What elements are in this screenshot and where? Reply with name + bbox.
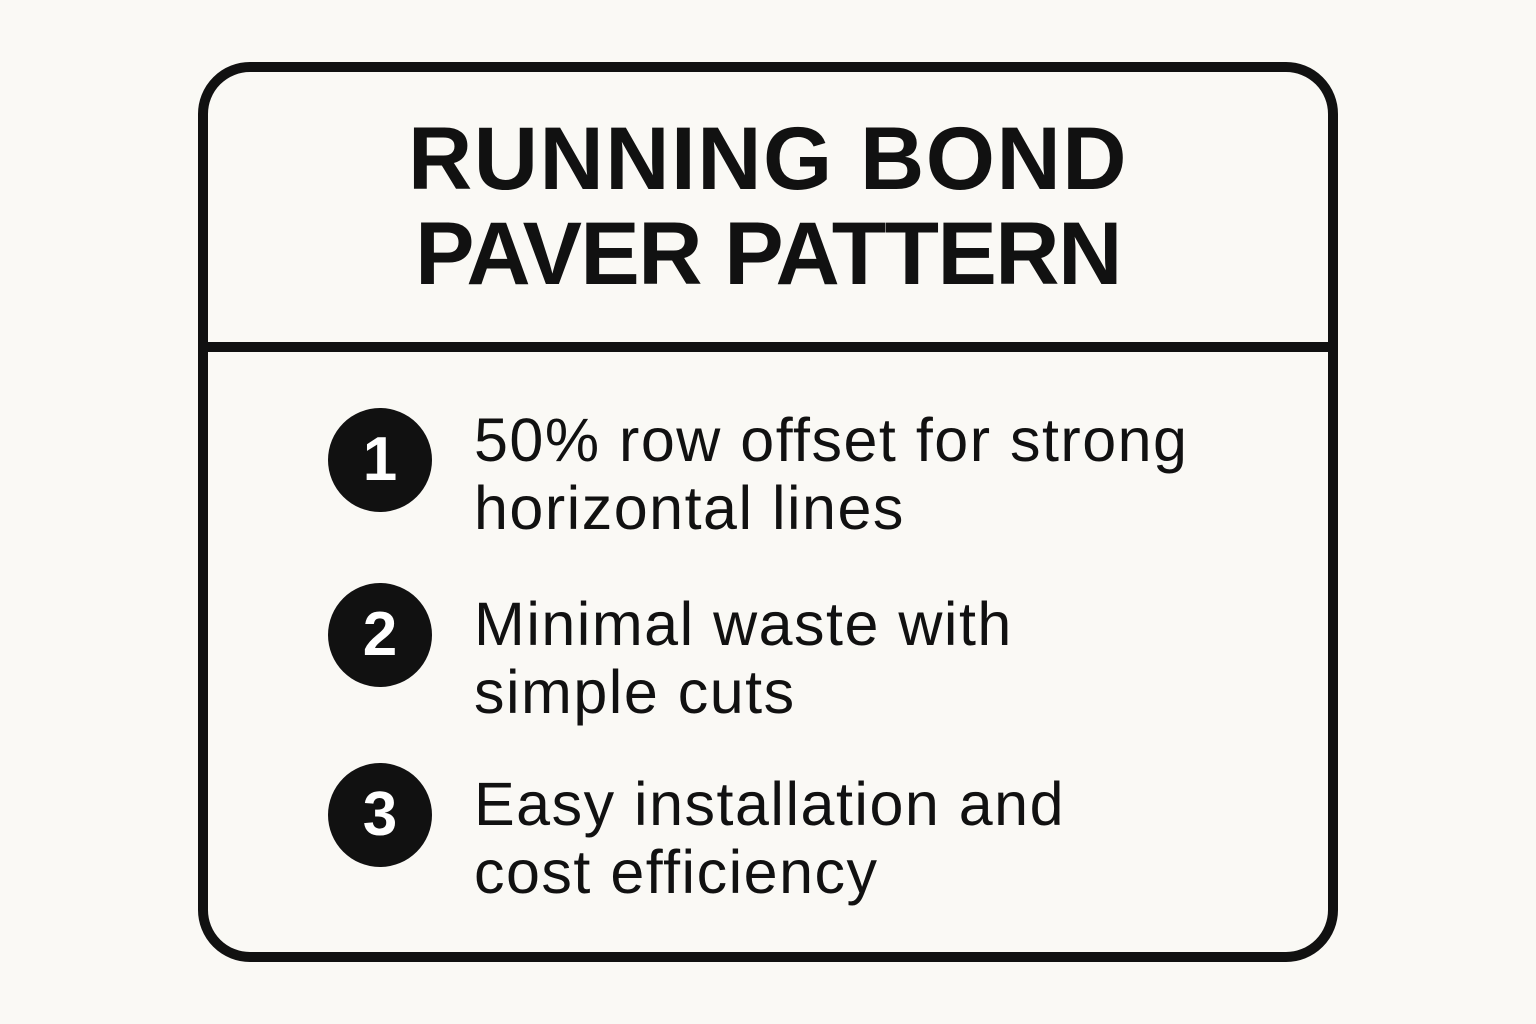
icon: number 1 [328,408,432,512]
text: item 2: Minimal waste with [474,590,1013,658]
title: PAVER PATTERN [415,203,1121,303]
title [408,108,1128,303]
icon: number 2: 2 [363,600,397,669]
icon: number 3: 3 [363,780,397,849]
title: RUNNING BOND [408,108,1128,208]
card frame [198,62,1338,962]
text: item 1: horizontal lines [474,474,905,542]
item 3 [328,763,1065,906]
item 2 [328,583,1013,726]
icon: number 2 [328,583,432,687]
text: item 1 [474,406,1188,542]
icon: number 1: 1 [363,425,397,494]
divider line [198,342,1338,352]
text: item 2 [474,590,1013,726]
text: item 3 [474,770,1065,906]
text: item 1: 50% row offset for strong [474,406,1188,474]
icon: number 3 [328,763,432,867]
text: item 3: Easy installation and [474,770,1065,838]
text: item 2: simple cuts [474,658,796,726]
text: item 3: cost efficiency [474,838,878,906]
item 1 [328,406,1188,542]
